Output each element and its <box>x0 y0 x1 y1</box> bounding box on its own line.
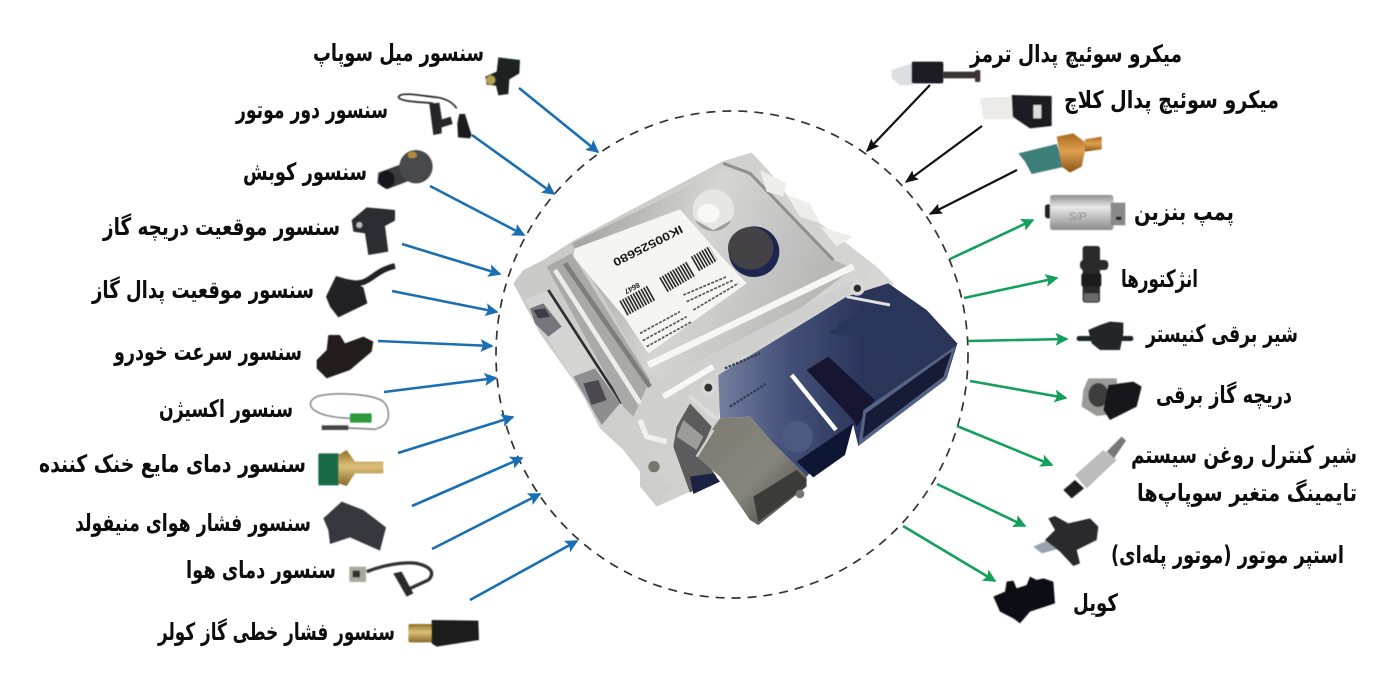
icon: crankshaft sensor <box>398 94 472 138</box>
icon: fuel pump: S/P <box>1068 211 1087 223</box>
icon: ignition coil <box>993 577 1055 623</box>
dashed circle around ECU <box>496 111 968 598</box>
arrows: switches to ECU <box>867 85 1017 214</box>
icon: camshaft sensor <box>485 57 520 95</box>
ECU navy connector <box>690 281 957 477</box>
icon: oxygen sensor <box>310 394 388 430</box>
icon: stepper motor <box>1033 516 1098 566</box>
right labels <box>969 40 1357 617</box>
icon: electric throttle <box>1082 378 1142 420</box>
ECU gray connector <box>673 403 807 525</box>
part number: IK00525680 <box>611 222 684 268</box>
icon: pedal position sensor <box>326 266 395 317</box>
label: throttle position sensor: سنسور موقعیت دریچه گاز <box>102 213 340 241</box>
icon: fuel pump <box>1045 195 1125 230</box>
label: crankshaft sensor: سنسور دور موتور <box>235 96 388 124</box>
label: oxygen sensor: سنسور اکسیژن <box>159 395 293 423</box>
icon: canister valve <box>1077 322 1133 350</box>
label: pedal position sensor: سنسور موقعیت پدال گاز <box>91 276 314 304</box>
icon: throttle position sensor <box>352 207 395 255</box>
left labels <box>39 39 484 646</box>
label: coil: کویل <box>1073 589 1118 617</box>
label: coolant temperature sensor: سنسور دمای مایع خنک کننده <box>39 450 306 478</box>
label: clutch micro switch: میکرو سوئیچ پدال کلاچ <box>1064 86 1279 114</box>
label: AC pressure sensor: سنسور فشار خطی گاز کولر <box>157 618 395 646</box>
icon: manifold pressure sensor <box>323 502 386 551</box>
icon: teal and brass sensor <box>1018 133 1102 174</box>
icon: oil control valve <box>1063 437 1126 498</box>
icon: clutch pedal switch <box>981 95 1052 128</box>
label small print <box>640 277 738 347</box>
icon: knock sensor <box>377 150 433 189</box>
arrows: input sensors to ECU <box>378 88 598 600</box>
icon: air temperature sensor <box>349 563 432 597</box>
label: air temperature sensor: سنسور دمای هوا <box>186 556 336 584</box>
icon: injector <box>1080 246 1108 303</box>
arrows: ECU to actuators <box>903 220 1067 581</box>
label: brake micro switch: میکرو سوئیچ پدال ترمز <box>969 40 1182 68</box>
ECU metal housing <box>513 153 893 507</box>
barcodes <box>623 253 713 308</box>
label: vehicle speed sensor: سنسور سرعت خودرو <box>113 338 302 366</box>
icon: vehicle speed sensor <box>317 335 373 378</box>
icon: brake pedal switch <box>892 62 980 85</box>
batch number: 8647 <box>623 281 641 296</box>
label: canister valve: شیر برقی کنیستر <box>1145 320 1298 348</box>
label: knock sensor: سنسور کوبش <box>243 158 367 186</box>
label: camshaft sensor: سنسور میل سوپاپ <box>313 39 484 67</box>
icon: AC pressure sensor <box>408 620 479 647</box>
ECU pressure cap <box>728 226 779 277</box>
icon: coolant temperature sensor <box>318 450 383 486</box>
label: electric throttle: دریچه گاز برقی <box>1156 381 1292 409</box>
right component icons <box>892 62 1142 623</box>
ECU white label <box>573 209 747 353</box>
label: injectors: انژکتورها <box>1121 265 1198 293</box>
ECU unit <box>513 153 957 525</box>
left sensor icons <box>310 57 520 647</box>
label: fuel pump: پمپ بنزین <box>1134 198 1234 226</box>
label: manifold pressure sensor: سنسور فشار هوای منیفولد <box>75 509 311 537</box>
